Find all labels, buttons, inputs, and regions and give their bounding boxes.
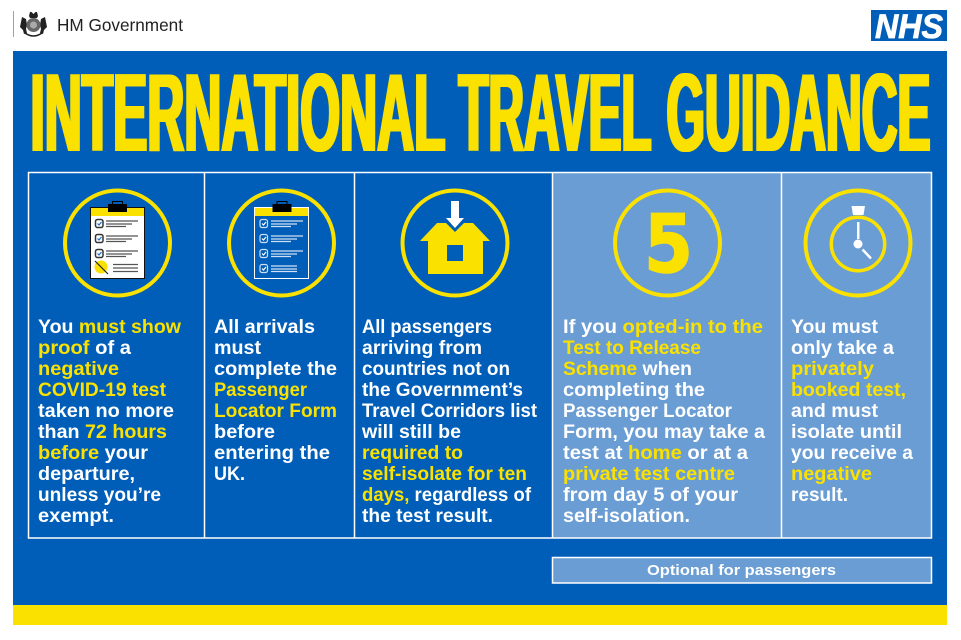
text: proof of test: unless you’re — [38, 485, 161, 506]
text: privately booked: You must — [791, 317, 879, 338]
text: test to release: Form, you may take a — [563, 422, 765, 443]
text: locator form: entering the — [214, 443, 330, 464]
text: test to release: completing the — [563, 380, 705, 401]
light blue optional background — [553, 173, 931, 538]
text: privately booked: only take a — [791, 338, 894, 359]
text: self-isolation: countries not on — [362, 359, 510, 380]
text: test to release — [563, 317, 765, 527]
text: locator form: Locator Form — [214, 401, 337, 422]
text: locator form: before — [214, 422, 275, 443]
text: self-isolation: will still be — [361, 422, 461, 443]
text: self-isolation: self-isolate for ten — [362, 464, 527, 485]
panel: proof of negative test — [38, 190, 181, 527]
text: test to release: test at home or at a — [563, 443, 748, 464]
text: test to release: If you opted-in to the — [563, 317, 763, 338]
text: privately booked: isolate until — [791, 422, 902, 443]
text: test to release: Test to Release — [563, 338, 701, 359]
text: self-isolation: Travel Corridors list — [362, 401, 538, 422]
text: self-isolation: the test result. — [362, 506, 493, 527]
text: locator form: complete the — [214, 359, 337, 380]
text: privately booked: and must — [791, 401, 879, 422]
icon: number five: 5 — [644, 198, 693, 291]
text: self-isolation: All passengers — [362, 317, 492, 338]
wordmark: HM Government — [57, 15, 183, 35]
table frame — [28, 172, 932, 538]
yellow footer band — [13, 605, 947, 625]
text: locator form: All arrivals — [214, 317, 315, 338]
text: privately booked: negative — [791, 464, 872, 485]
icon: clipboard with test result — [65, 190, 170, 296]
text: privately booked: privately — [791, 359, 874, 380]
text: locator form: must — [214, 338, 262, 359]
text: locator form: Passenger — [214, 380, 308, 401]
panel: privately booked test — [791, 190, 913, 506]
text: proof of test: You must show — [38, 317, 181, 338]
text: test to release: private test centre — [563, 464, 735, 485]
icon: clipboard form — [229, 190, 334, 296]
text: test to release: from day 5 of your — [563, 485, 739, 506]
title: INTERNATIONAL — [30, 51, 446, 175]
text: proof of test: than 72 hours — [38, 422, 167, 443]
icon: number five — [615, 190, 720, 296]
NHS logo: NHS — [875, 8, 943, 46]
text: privately booked: you receive a — [791, 443, 913, 464]
panel: passenger locator form — [214, 190, 337, 485]
text: self-isolation — [361, 317, 538, 527]
panel: self-isolation requirement — [361, 190, 538, 527]
title: TRAVEL — [458, 51, 652, 175]
text: proof of test: departure, — [38, 464, 135, 485]
text: proof of test: before your — [38, 443, 149, 464]
text: proof of test — [38, 317, 181, 527]
text: self-isolation: required to — [362, 443, 463, 464]
text: test to release: Passenger Locator — [563, 401, 733, 422]
text: self-isolation: days, regardless of — [362, 485, 532, 506]
text: locator form — [214, 317, 337, 485]
text: privately booked — [791, 317, 913, 506]
text: proof of test: taken no more — [38, 401, 174, 422]
icon: stopwatch — [806, 190, 910, 296]
text: proof of test: COVID-19 test — [38, 380, 167, 401]
text: proof of test: negative — [38, 359, 119, 380]
text: test to release: Scheme when — [563, 359, 692, 380]
text: test to release: self-isolation. — [563, 506, 690, 527]
text: privately booked: booked test, — [791, 380, 906, 401]
icon: house with arrow — [402, 190, 508, 296]
icon: royal crest — [20, 12, 47, 36]
panel: test to release — [563, 190, 765, 527]
text: proof of test: exempt. — [38, 506, 114, 527]
optional for passengers label — [552, 558, 932, 583]
text: self-isolation: the Government’s — [362, 380, 523, 401]
optional for passengers label: Optional for passengers — [647, 562, 836, 579]
header: HM Government logo — [13, 11, 183, 37]
text: self-isolation: arriving from — [362, 338, 482, 359]
text: proof of test: proof of a — [38, 338, 131, 359]
text: privately booked: result. — [791, 485, 848, 506]
text: locator form: UK. — [214, 464, 245, 485]
